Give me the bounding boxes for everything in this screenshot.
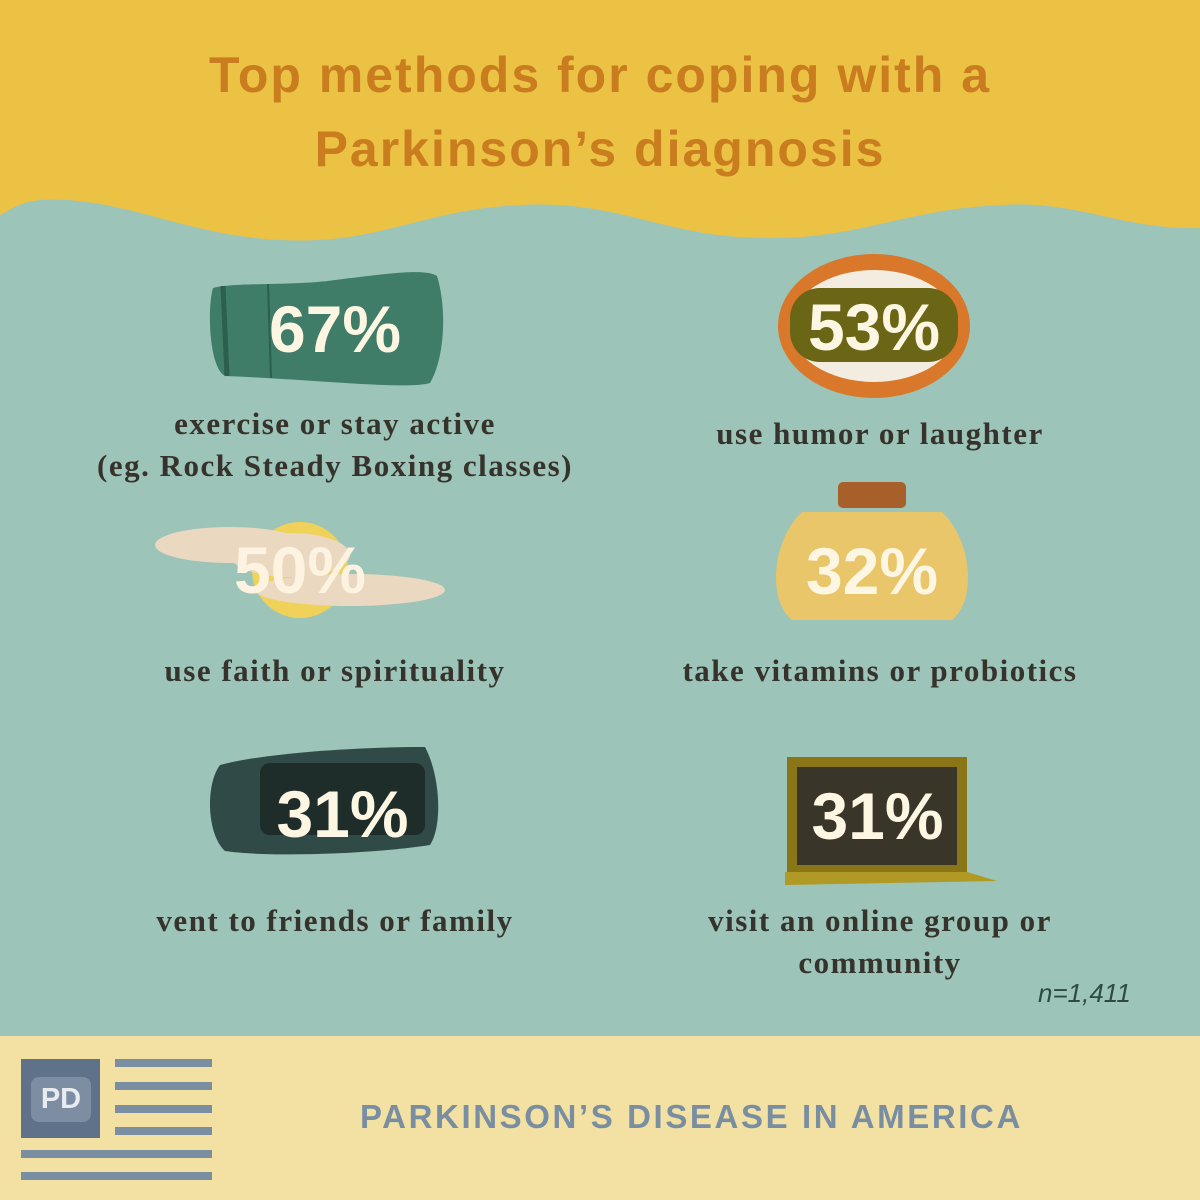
logo (21, 1059, 212, 1180)
label: online group: community (798, 945, 962, 980)
label: faith: use faith or spirituality (165, 653, 505, 688)
icon: mouth 53%: 53% (808, 290, 940, 364)
label: vitamins: take vitamins or probiotics (682, 653, 1078, 688)
label: online group (708, 903, 1052, 980)
label: exercise: exercise or stay active (174, 406, 496, 441)
label: exercise: (eg. Rock Steady Boxing classes) (97, 448, 573, 483)
label: online group: visit an online group or (708, 903, 1052, 938)
icon: mouth 53% (778, 254, 970, 398)
label: vent: vent to friends or family (156, 903, 514, 938)
icon: clouds and sun 50%: 50% (234, 533, 366, 607)
footer title: PARKINSON’S DISEASE IN AMERICA (360, 1098, 1023, 1135)
title: Top methods for coping with a (209, 47, 991, 103)
footer (0, 1036, 1200, 1200)
logo: PD (41, 1083, 81, 1115)
icon: laptop 31% (785, 757, 997, 885)
icon: boxing glove 67%: 67% (269, 292, 401, 366)
label: exercise (97, 406, 573, 483)
header background with wave (0, 0, 1200, 240)
label: humor: use humor or laughter (716, 416, 1044, 451)
icon: clouds and sun 50% (155, 522, 445, 618)
icon: laptop 31%: 31% (811, 779, 944, 853)
icon: phone 31% (210, 747, 438, 854)
icon: vitamin jar 32% (776, 482, 968, 620)
sample size note: n=1,411 (1038, 978, 1131, 1008)
icon: vitamin jar 32%: 32% (806, 534, 938, 608)
icon: phone 31%: 31% (276, 777, 409, 851)
icon: boxing glove 67% (210, 272, 444, 386)
title (209, 47, 991, 177)
title: Parkinson’s diagnosis (315, 121, 885, 177)
